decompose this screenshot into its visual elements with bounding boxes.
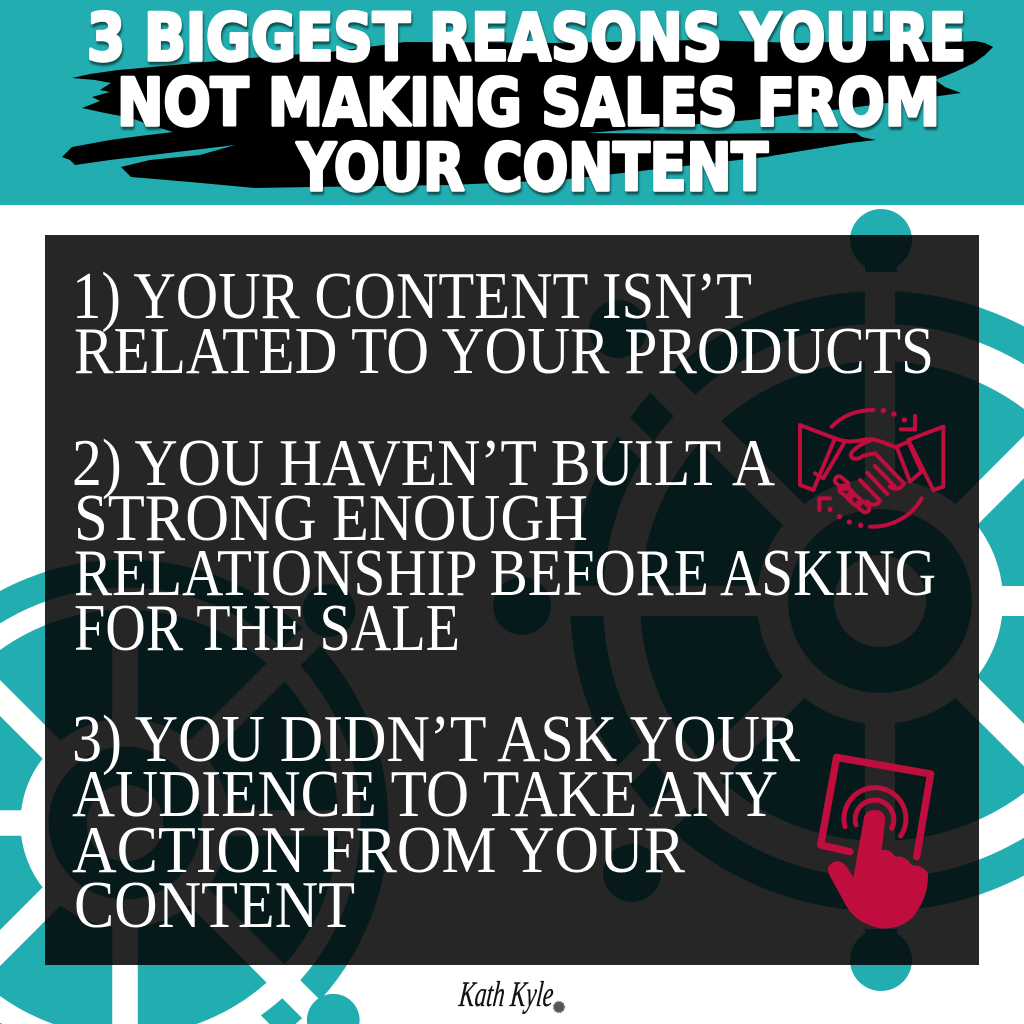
reason 3 text: 3) YOU DIDN’T ASK YOUR <box>72 702 800 776</box>
reason 2 text: STRONG ENOUGH <box>74 481 588 555</box>
reason 3 text: ACTION FROM YOUR <box>72 813 685 887</box>
background mandala: right <box>493 209 1024 991</box>
icon: finger tapping screen <box>821 757 931 929</box>
signature: Kath Kyle <box>457 974 556 1014</box>
reason 3 text: AUDIENCE TO TAKE ANY <box>72 757 778 831</box>
reason 2 text: 2) YOU HAVEN’T BUILT A <box>72 426 775 500</box>
reason 1 text: RELATED TO YOUR PRODUCTS <box>74 314 934 388</box>
title <box>87 1 966 206</box>
icon: handshake <box>800 408 943 528</box>
header band <box>0 0 1024 205</box>
title: YOUR CONTENT <box>296 131 768 206</box>
dark panel <box>45 235 979 965</box>
background mandala: left <box>0 542 405 1024</box>
reason 1 text <box>72 259 934 388</box>
icon: signature flower <box>554 1002 564 1012</box>
reason 3 text: CONTENT <box>74 868 355 942</box>
reason 2 text <box>72 426 936 665</box>
brush stroke behind title <box>62 40 993 188</box>
reason 1 text: 1) YOUR CONTENT ISN’T <box>72 259 752 333</box>
reason 2 text: FOR THE SALE <box>74 591 460 665</box>
reason 3 text <box>72 702 800 942</box>
